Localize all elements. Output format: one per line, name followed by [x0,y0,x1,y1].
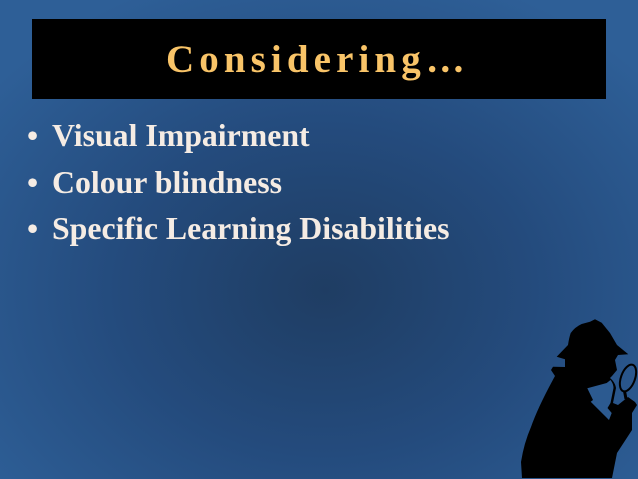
bullet: specific learning disabilities: • [27,211,38,246]
title: Considering… [166,38,470,81]
bullet: colour blindness [27,165,282,200]
bullet: colour blindness: • [27,165,38,200]
title bar [32,19,606,99]
bullet: visual impairment: • [27,118,38,153]
bullet list: Specific Learning Disabilities [52,211,449,246]
bullet list: Colour blindness [52,165,282,200]
bullet list: Visual Impairment [52,118,310,153]
bullet: visual impairment [27,118,310,153]
bullet: specific learning disabilities [27,211,449,246]
bullet list [27,118,449,246]
